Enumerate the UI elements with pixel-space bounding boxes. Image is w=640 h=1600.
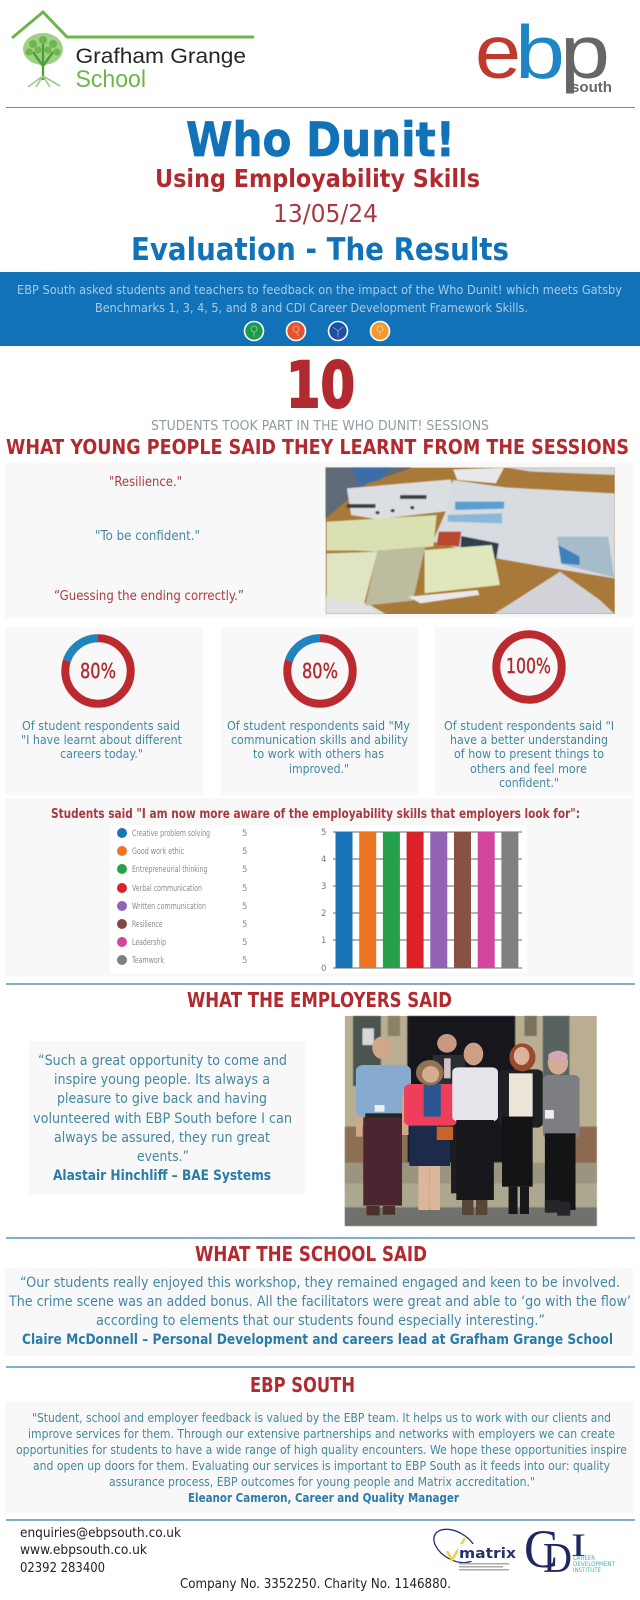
logo: career development institute: CAREER bbox=[573, 1554, 595, 1562]
quote text: according to elements that our students found especially interesting.” bbox=[96, 1313, 545, 1329]
logo: career development institute: C bbox=[524, 1519, 558, 1579]
stat text: to work with others has bbox=[253, 747, 384, 761]
legend: 5 bbox=[242, 902, 247, 912]
intro text: Benchmarks 1, 3, 4, 5, and 8 and CDI Career Development Framework Skills. bbox=[95, 300, 528, 315]
stat text bbox=[21, 719, 182, 761]
stat text: of how to present things to bbox=[454, 747, 604, 761]
legend: Written communication bbox=[132, 902, 206, 912]
quote text: always be assured, they run great bbox=[54, 1130, 270, 1146]
legend bbox=[117, 828, 247, 966]
bar chart bbox=[321, 828, 522, 974]
icons: career skill badges bbox=[244, 322, 390, 340]
stat text: improved." bbox=[289, 762, 349, 776]
person: man in white shirt bbox=[452, 1043, 498, 1215]
panel: employer quote bbox=[29, 1041, 305, 1195]
stat text: communication skills and ability bbox=[231, 733, 408, 747]
school subtitle: School bbox=[76, 66, 146, 93]
stat text: "I have learnt about different bbox=[21, 733, 182, 747]
panel: school quote bbox=[5, 1268, 633, 1356]
contact details bbox=[20, 1525, 181, 1576]
logo: Grafham Grange School bbox=[12, 12, 254, 93]
subtitle: Using Employability Skills bbox=[155, 164, 480, 193]
panel: ebp south quote bbox=[5, 1402, 633, 1513]
quote: confident: "To be confident." bbox=[95, 529, 200, 544]
stat text: Of student respondents said "I bbox=[444, 719, 614, 733]
bar chart: 2 bbox=[321, 909, 326, 919]
legend: Creative problem solving bbox=[132, 829, 210, 839]
person: woman in pink jacket bbox=[404, 1060, 457, 1210]
legend: Leadership bbox=[132, 938, 166, 948]
logo: ebp south: south bbox=[571, 79, 612, 96]
panel: stat card 80% careers bbox=[5, 627, 203, 795]
legend: 5 bbox=[242, 829, 247, 839]
photo: crime scene papers on a table bbox=[326, 468, 615, 614]
legend: Teamwork bbox=[131, 956, 164, 966]
logo: career development institute: D bbox=[543, 1536, 572, 1582]
chart: donut 100% bbox=[496, 634, 562, 700]
logo: career development institute: I bbox=[571, 1528, 586, 1564]
chart: donut 80% bbox=[65, 638, 131, 704]
stat text bbox=[227, 719, 410, 776]
quote text bbox=[8, 1275, 631, 1329]
company details: Company No. 3352250. Charity No. 1146880. bbox=[180, 1576, 451, 1592]
person: woman with red hair bbox=[499, 1043, 543, 1214]
legend: Entrepreneurial thinking bbox=[132, 865, 208, 875]
legend: 5 bbox=[242, 938, 247, 948]
contact details: www.ebpsouth.co.uk bbox=[20, 1542, 147, 1558]
heading: evaluation results: Evaluation - The Results bbox=[131, 232, 509, 268]
heading: what the employers said: WHAT THE EMPLOYERS SAID bbox=[187, 988, 452, 1012]
quote text: “Such a great opportunity to come and bbox=[38, 1053, 287, 1069]
chart: donut 80%: 80% bbox=[302, 659, 338, 683]
legend: 5 bbox=[242, 884, 247, 894]
icon: green house roof line bbox=[12, 12, 254, 38]
contact details: 02392 283400 bbox=[20, 1560, 105, 1576]
photo: group of employers outside building bbox=[345, 1016, 597, 1226]
stat text: have a better understanding bbox=[450, 733, 608, 747]
icon: tree bbox=[23, 33, 63, 87]
stat text: Of student respondents said "My bbox=[227, 719, 410, 733]
logo: ebp south: e bbox=[475, 10, 521, 94]
logo: ebp south: b bbox=[515, 10, 565, 94]
school name: Grafham Grange bbox=[76, 45, 246, 68]
chart: donut 80% bbox=[287, 638, 353, 704]
logo: career development institute: INSTITUTE bbox=[573, 1566, 601, 1574]
intro text bbox=[17, 282, 623, 315]
quote: resilience: "Resilience." bbox=[109, 475, 182, 490]
person: woman in grey cardigan bbox=[543, 1051, 580, 1216]
panel: stat card 100% presenting bbox=[435, 627, 633, 795]
quote attribution: Eleanor Cameron, Career and Quality Manager bbox=[188, 1490, 460, 1505]
stat text: Of student respondents said bbox=[22, 719, 180, 733]
bar chart: 4 bbox=[321, 855, 326, 865]
legend: Good work ethic bbox=[132, 847, 184, 857]
date: 13/05/24 bbox=[273, 199, 378, 228]
legend: 5 bbox=[242, 956, 247, 966]
logo: matrix: matrix bbox=[459, 1546, 517, 1562]
logo: matrix bbox=[428, 1522, 518, 1570]
title: Who Dunit! bbox=[186, 113, 455, 168]
person: man in back bbox=[433, 1034, 465, 1193]
stat caption: STUDENTS TOOK PART IN THE WHO DUNIT! SESSIONS bbox=[151, 418, 489, 434]
logo: career development institute: DEVELOPMENT bbox=[573, 1560, 615, 1568]
legend: 5 bbox=[242, 865, 247, 875]
legend: 5 bbox=[242, 847, 247, 857]
logo: career development institute bbox=[524, 1519, 615, 1582]
quote text bbox=[33, 1053, 292, 1165]
chart: donut 100%: 100% bbox=[506, 654, 551, 678]
logo: ebp south: p bbox=[560, 10, 610, 94]
quote: guessing the ending: “Guessing the ending correctly.” bbox=[54, 589, 244, 604]
stat: number of students: 10 bbox=[286, 349, 355, 422]
quote text: assurance process, EBP outcomes for young people and Matrix accreditation." bbox=[109, 1474, 535, 1489]
quote text: pleasure to give back and having bbox=[57, 1091, 267, 1107]
heading: ebp south: EBP SOUTH bbox=[250, 1373, 355, 1397]
panel: blue intro band bbox=[0, 272, 640, 346]
bar chart: 3 bbox=[321, 882, 326, 892]
legend: 5 bbox=[242, 920, 247, 930]
stat text: careers today." bbox=[60, 747, 143, 761]
stat text bbox=[444, 719, 614, 790]
panel: stat card 80% communication bbox=[221, 627, 418, 795]
logo: ebp south bbox=[475, 10, 612, 96]
contact details: enquiries@ebpsouth.co.uk bbox=[20, 1525, 181, 1541]
panel: student quotes and photo bbox=[5, 463, 633, 618]
stat text: confident." bbox=[499, 776, 559, 790]
quote text bbox=[16, 1410, 627, 1489]
quote text: events.” bbox=[137, 1149, 189, 1165]
bar chart: 1 bbox=[321, 936, 326, 946]
bar chart: 5 bbox=[321, 828, 326, 838]
quote text: volunteered with EBP South before I can bbox=[33, 1111, 292, 1127]
panel: employability skills chart bbox=[5, 798, 633, 977]
stat text: others and feel more bbox=[470, 762, 587, 776]
heading: what the school said: WHAT THE SCHOOL SAID bbox=[195, 1242, 427, 1266]
bar chart: 0 bbox=[321, 964, 326, 974]
quote text: inspire young people. Its always a bbox=[54, 1072, 270, 1088]
legend: Resilience bbox=[132, 920, 162, 930]
chart: donut 80%: 80% bbox=[80, 659, 116, 683]
legend: Verbal communication bbox=[132, 884, 202, 894]
person: man in check shirt bbox=[356, 1036, 411, 1215]
quote attribution: Alastair Hinchliff – BAE Systems bbox=[53, 1168, 271, 1184]
